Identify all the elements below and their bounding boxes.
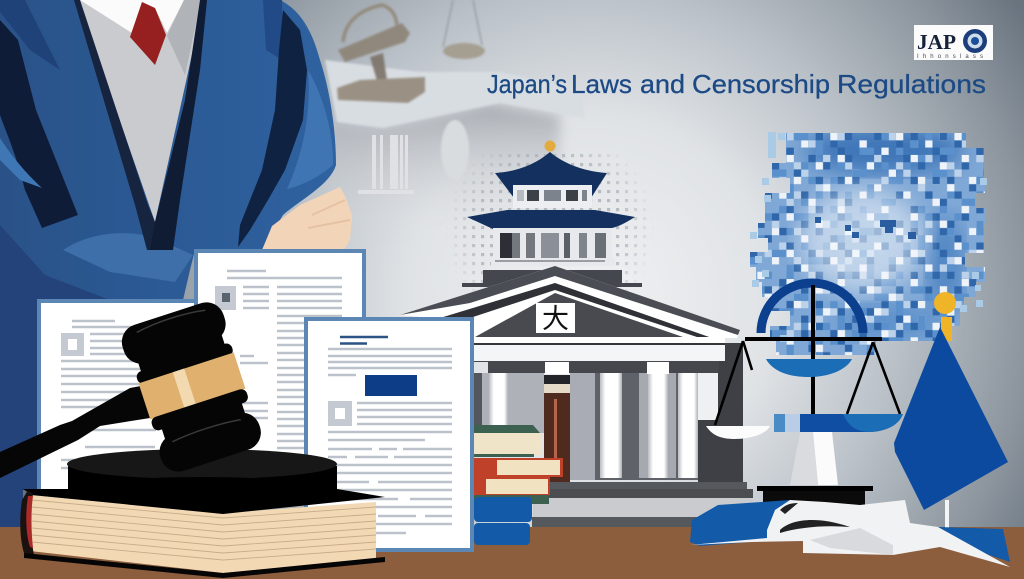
document picture placeholder <box>61 333 84 356</box>
scales of justice <box>706 283 903 505</box>
logo wordmark: JAP <box>917 30 956 54</box>
tower upper floor <box>513 185 592 208</box>
right sleeve highlight <box>287 70 333 189</box>
hand <box>262 187 352 250</box>
left collar band <box>0 0 60 70</box>
sounding block <box>67 449 337 505</box>
shirt shadow right <box>167 0 201 75</box>
finial <box>544 140 556 152</box>
left dark lower robe <box>0 225 110 527</box>
scale beam <box>745 337 882 341</box>
open book right cover <box>938 527 1010 562</box>
forearm fold highlight <box>63 233 193 282</box>
center dish <box>766 359 852 377</box>
logo emblem <box>963 29 987 53</box>
logo tagline: Ihhonslass <box>917 54 983 60</box>
right upper band <box>263 0 282 60</box>
document back middle <box>196 251 364 461</box>
document lines <box>227 271 342 448</box>
colonnade <box>474 362 743 482</box>
ghost statue <box>441 120 469 180</box>
open book on table <box>690 500 1010 567</box>
ghost gavel <box>337 5 425 103</box>
ghost ceiling and walls <box>325 60 585 235</box>
mosaic facial dark cells <box>815 217 916 239</box>
book cover top <box>23 489 385 514</box>
red tie <box>130 2 166 65</box>
document back left <box>39 301 199 491</box>
open book left cover <box>690 500 790 546</box>
ghost scale <box>443 0 485 59</box>
tower base <box>462 270 642 287</box>
mosaic loose cells <box>750 132 987 342</box>
blue flag <box>894 292 1008 528</box>
table <box>0 527 1024 579</box>
lapel left edge <box>74 0 160 250</box>
shirt <box>78 0 204 222</box>
law book under gavel <box>20 489 385 578</box>
halftone dots behind tower <box>454 154 646 292</box>
mosaic tonal base <box>750 126 986 358</box>
gavel handle <box>0 385 150 478</box>
red book lower <box>474 477 550 495</box>
document lines <box>328 349 452 533</box>
dark green book <box>474 495 549 504</box>
ghosted courtroom backdrop <box>325 0 585 235</box>
book cover bottom <box>24 553 385 578</box>
left pan <box>706 426 770 439</box>
book spine <box>20 490 34 555</box>
flag cloth <box>894 327 1008 510</box>
document front <box>306 319 472 550</box>
pediment sign: 大 <box>542 297 569 336</box>
scale base <box>757 486 873 505</box>
title: Laws <box>571 69 632 99</box>
book pages <box>30 495 376 573</box>
dark page curl <box>780 503 798 514</box>
scale arch <box>761 283 863 333</box>
open book pages <box>690 500 1010 567</box>
scale chains <box>715 341 900 425</box>
tower lower floor <box>491 228 615 266</box>
title: Japan’s <box>487 69 567 99</box>
robe body <box>0 0 336 527</box>
gavel head <box>117 298 266 477</box>
stand shadow <box>790 432 818 485</box>
lapel right edge <box>150 0 207 250</box>
stacked books <box>474 425 563 545</box>
blue books <box>474 497 532 545</box>
book page lines <box>32 500 376 560</box>
page shading <box>810 528 893 555</box>
right sleeve shadow <box>238 10 307 247</box>
document picture placeholder <box>215 286 236 310</box>
title: and <box>640 69 685 99</box>
right pan <box>843 414 903 432</box>
title: Censorship <box>692 69 830 99</box>
gavel <box>0 298 266 478</box>
flag pole bottom <box>945 500 949 528</box>
shirt collar white <box>80 0 184 33</box>
scale post <box>811 285 815 415</box>
navy highlighted block <box>365 375 417 396</box>
logo <box>914 25 993 60</box>
document picture placeholder <box>328 401 352 426</box>
red book upper <box>474 458 563 477</box>
pediment sign <box>536 297 575 336</box>
title: Regulations <box>837 69 986 99</box>
tower lower roof <box>467 210 635 246</box>
entablature <box>474 337 725 373</box>
right wall <box>717 343 743 482</box>
blue bar <box>774 414 870 432</box>
document heading lines <box>340 337 388 344</box>
pediment <box>400 266 740 338</box>
government building <box>400 140 753 527</box>
mosaic cells <box>750 133 986 358</box>
judge robe <box>0 0 336 527</box>
steps <box>532 482 753 527</box>
red spine strip <box>26 496 33 548</box>
inner page shadow <box>780 520 850 533</box>
gavel band <box>139 352 245 420</box>
pale column stand <box>813 432 838 485</box>
ghost barred window <box>358 135 414 194</box>
tower upper roof <box>495 152 607 198</box>
gold finial <box>934 292 956 341</box>
green book <box>474 425 542 457</box>
pixelated censored face mosaic <box>750 126 987 358</box>
left sleeve highlight <box>0 138 42 188</box>
document lines <box>61 321 156 468</box>
left sleeve shadow <box>0 20 78 228</box>
door <box>544 375 570 482</box>
